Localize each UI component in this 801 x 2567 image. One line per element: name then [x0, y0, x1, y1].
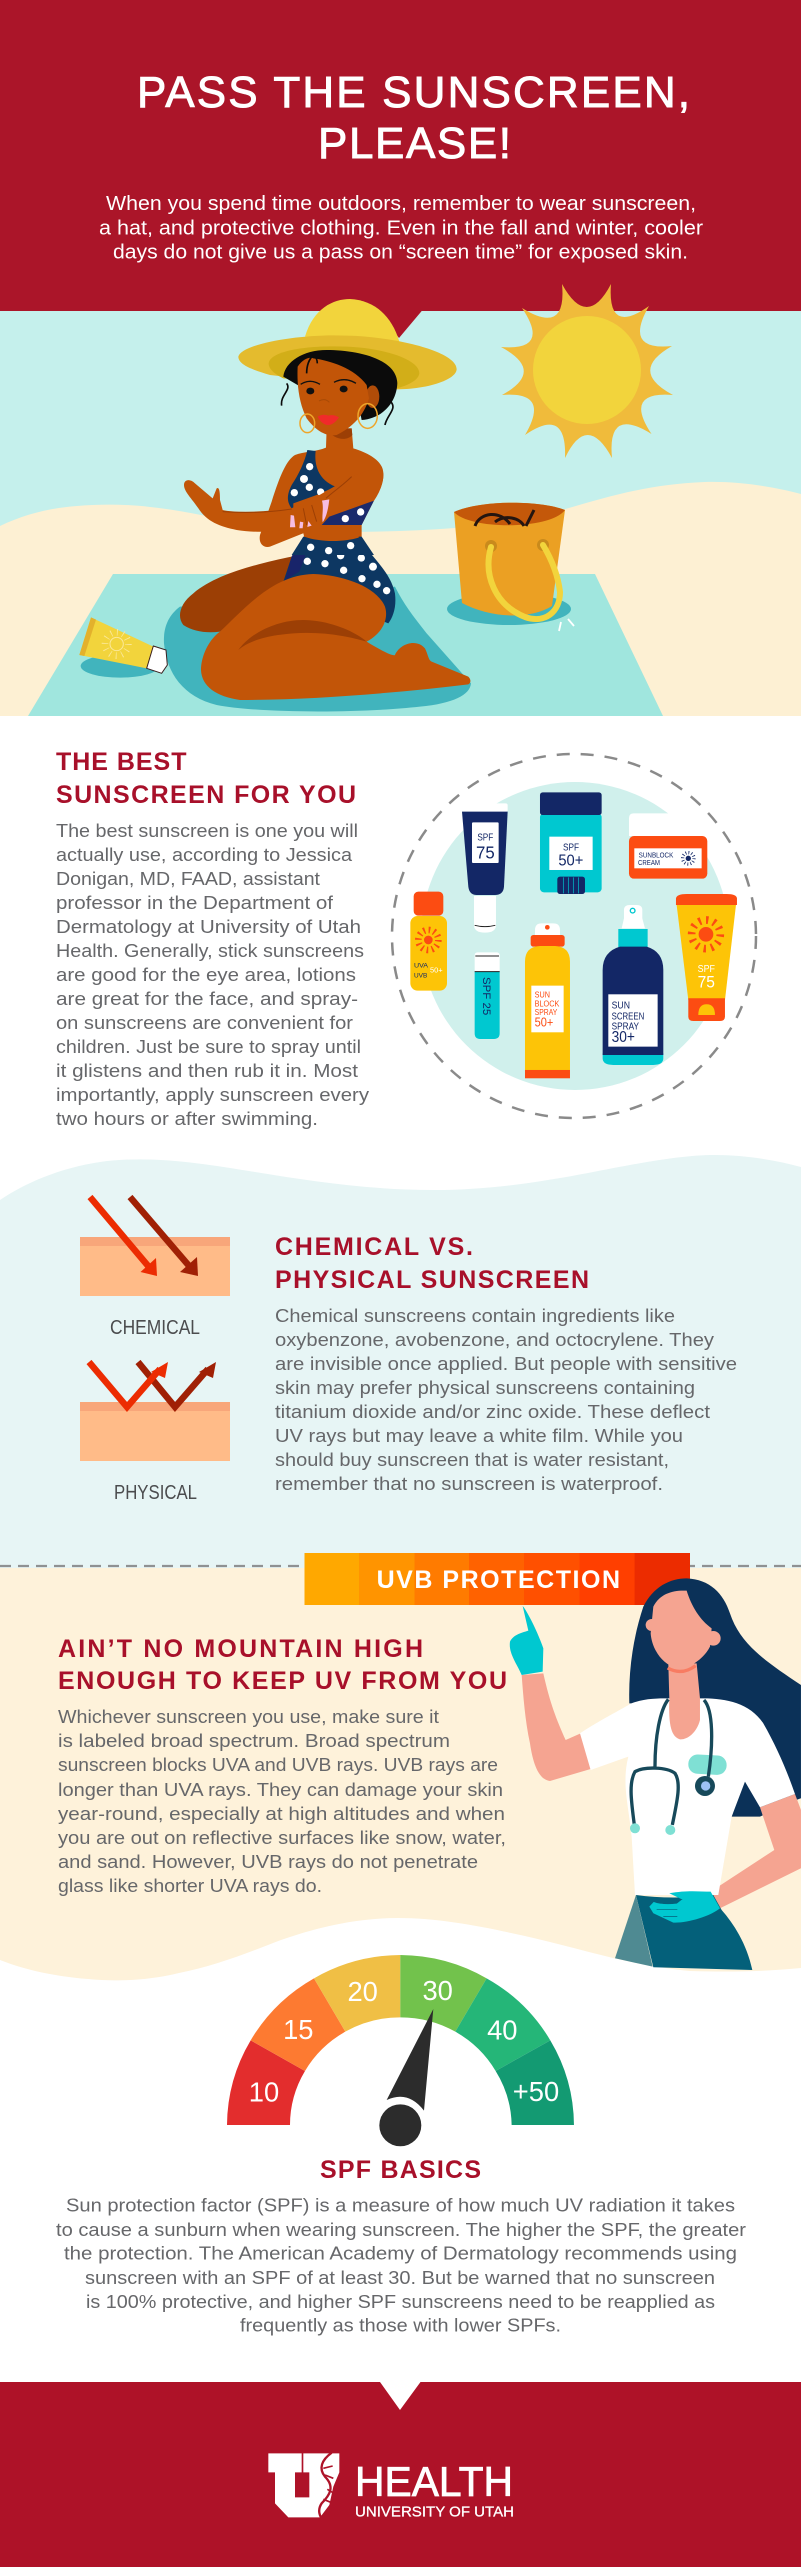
title — [137, 68, 690, 168]
text block: mountain: glass like shorter UVA rays do. — [58, 1875, 322, 1896]
text block: best sunscreen — [56, 820, 370, 1129]
icon: sunscreen tube — [79, 617, 167, 678]
logo: university of utah health: UNIVERSITY OF UTAH — [355, 2504, 514, 2521]
swimsuit bottoms — [283, 536, 395, 623]
text block: best sunscreen: professor in the Department of — [56, 892, 334, 913]
tube spf 75: SPF — [477, 832, 493, 843]
text block: spf basics: is 100% protective, and higher SPF sunscreens need to be reapplied as — [86, 2291, 715, 2312]
text block: spf basics: the protection. The American Academy of Dermatology recommends using — [64, 2243, 737, 2264]
uvb protection bar: UVB PROTECTION — [377, 1566, 620, 1594]
intro text: When you spend time outdoors, remember to wear sunscreen, — [106, 193, 696, 215]
logo: university of utah health: HEALTH — [355, 2458, 513, 2505]
heading: the best sunscreen for you — [56, 748, 356, 809]
spray sun block 50+: SUN — [535, 990, 550, 1000]
glove pointing — [510, 1606, 543, 1675]
intro text — [99, 193, 703, 264]
chart: spf gauge: 10 — [249, 2077, 279, 2108]
heading: the best sunscreen for you: SUNSCREEN FOR YOU — [56, 781, 356, 809]
text block: spf basics: sunscreen with an SPF of at least 30. But be warned that no sunscreen — [85, 2267, 715, 2288]
text block: mountain: year-round, especially at high altitudes and when — [58, 1803, 505, 1824]
hair — [629, 1578, 801, 1817]
stick spf 50+: 50+ — [558, 852, 583, 869]
tube spf 75 — [462, 803, 508, 933]
illustration: doctor — [510, 1578, 801, 1970]
text block: mountain: longer than UVA rays. They can damage your skin — [58, 1779, 503, 1800]
intro text: days do not give us a pass on “screen time” for exposed skin. — [113, 242, 688, 264]
back thigh — [180, 557, 292, 632]
text block: chemical vs physical: titanium dioxide and/or zinc oxide. These deflect — [275, 1401, 711, 1422]
text block: best sunscreen: two hours or after swimming. — [56, 1108, 318, 1129]
sun — [501, 284, 673, 458]
tube spf 75 large — [676, 894, 737, 1021]
header panel — [0, 0, 801, 340]
text block: spf basics: Sun protection factor (SPF) is a measure of how much UV radiation it takes — [66, 2195, 735, 2216]
text block: chemical vs physical: Chemical sunscreens contain ingredients like — [275, 1305, 675, 1326]
panel: sunscreen products — [392, 754, 756, 1118]
logo: university of utah health — [268, 2453, 514, 2521]
heading: mountain: ENOUGH TO KEEP UV FROM YOU — [58, 1667, 507, 1695]
text block: best sunscreen: Health. Generally, stick sunscreens — [56, 940, 364, 961]
tube spf 75 large: 75 — [698, 973, 715, 992]
face — [646, 1591, 721, 1669]
stick spf 25 — [475, 952, 500, 1039]
text block: mountain: sunscreen blocks UVA and UVB rays. UVB rays are — [58, 1754, 498, 1775]
chart: spf gauge: 20 — [347, 1976, 378, 2007]
text block: best sunscreen: importantly, apply sunscreen every — [56, 1084, 370, 1105]
text block: mountain: Whichever sunscreen you use, make sure it — [58, 1706, 440, 1727]
title: PASS THE SUNSCREEN, — [137, 68, 690, 117]
text block: mountain — [58, 1706, 506, 1896]
front thigh — [201, 574, 470, 700]
stethoscope — [630, 1699, 715, 1835]
arms — [184, 470, 383, 532]
bottle uva uvb: 50+ — [430, 966, 443, 975]
chart: spf gauge — [227, 1955, 574, 2146]
heading: the best sunscreen for you: THE BEST — [56, 748, 186, 776]
chart: spf gauge: 30 — [422, 1975, 453, 2006]
hat crown — [305, 299, 399, 342]
text block: spf basics — [56, 2195, 746, 2336]
text block: chemical vs physical: remember that no sunscreen is waterproof. — [275, 1473, 663, 1494]
icon: physical sunscreen diagram — [80, 1362, 230, 1461]
heading: chemical vs physical: CHEMICAL VS. — [275, 1233, 473, 1261]
text block: spf basics: to cause a sunburn when wearing sunscreen. The higher the SPF, the greater — [56, 2219, 746, 2240]
title: PLEASE! — [318, 119, 511, 168]
text block: spf basics: frequently as those with lower SPFs. — [240, 2315, 561, 2336]
gauge needle — [379, 2009, 433, 2146]
jar sunblock cream: CREAM — [638, 858, 660, 867]
woman lower body and sunscreen tube — [79, 536, 471, 711]
text block: best sunscreen: The best sunscreen is one you will — [56, 820, 358, 841]
hat brim — [238, 335, 457, 389]
glove on hip — [649, 1891, 720, 1923]
footer panel — [0, 2382, 801, 2567]
neck — [668, 1663, 700, 1739]
panel: mountain section background — [0, 1568, 801, 1980]
woman upper body and hat — [184, 299, 457, 555]
skirt — [615, 1895, 752, 1970]
bottle uva uvb — [410, 892, 447, 991]
shirt — [580, 1698, 795, 1895]
text block: mountain: you are out on reflective surfaces like snow, water, — [58, 1827, 506, 1848]
tube spf 75 large: SPF — [698, 964, 715, 975]
spray sun block 50+: 50+ — [535, 1015, 553, 1029]
chart: spf gauge: 15 — [283, 2014, 314, 2045]
spray sun block 50+: SPRAY — [535, 1007, 558, 1017]
face — [297, 355, 379, 439]
heading: spf basics: SPF BASICS — [320, 2156, 481, 2184]
intro text: a hat, and protective clothing. Even in the fall and winter, cooler — [99, 218, 703, 240]
text block: chemical vs physical: should buy sunscreen that is water resistant, — [275, 1449, 669, 1470]
swimsuit top — [288, 450, 374, 555]
stick spf 50+ — [540, 792, 602, 894]
stick spf 50+: SPF — [563, 842, 579, 853]
bucket — [447, 503, 574, 631]
text block: best sunscreen: it glistens and then rub it in. Most — [56, 1060, 359, 1081]
text block: best sunscreen: Dermatology at University of Utah — [56, 916, 361, 937]
label: physical: PHYSICAL — [114, 1482, 197, 1504]
text block: best sunscreen: are good for the eye area, lotions — [56, 964, 356, 985]
text block: best sunscreen: are great for the face, and spray- — [56, 988, 358, 1009]
spray sun screen 30+: SUN — [612, 1001, 630, 1012]
text block: best sunscreen: actually use, according to Jessica — [56, 844, 353, 865]
spray sun screen 30+: SCREEN — [612, 1011, 644, 1022]
text block: chemical vs physical: are invisible once applied. But people with sensitive — [275, 1353, 737, 1374]
bottle uva uvb: UVA — [414, 962, 429, 969]
text block: best sunscreen: Donigan, MD, FAAD, assistant — [56, 868, 321, 889]
badge — [688, 1754, 727, 1775]
heading: chemical vs physical — [275, 1233, 589, 1294]
label: chemical: CHEMICAL — [110, 1317, 200, 1339]
heading: mountain: AIN’T NO MOUNTAIN HIGH — [58, 1635, 423, 1663]
torso — [260, 428, 383, 547]
towel — [28, 574, 663, 716]
uvb protection bar — [304, 1553, 690, 1605]
jar sunblock cream — [629, 813, 707, 879]
heading: mountain — [58, 1635, 507, 1695]
tube spf 75: 75 — [476, 842, 495, 862]
hair — [281, 350, 397, 425]
text block: mountain: and sand. However, UVB rays do not penetrate — [58, 1851, 478, 1872]
text block: mountain: is labeled broad spectrum. Broad spectrum — [58, 1730, 450, 1751]
chart: spf gauge: +50 — [513, 2076, 559, 2107]
spray sun block 50+: BLOCK — [535, 998, 560, 1008]
jar sunblock cream: SUNBLOCK — [639, 850, 673, 859]
text block: best sunscreen: on sunscreens are convenient for — [56, 1012, 353, 1033]
text block: best sunscreen: children. Just be sure to spray until — [56, 1036, 361, 1057]
text block: chemical vs physical: oxybenzone, avobenzone, and octocrylene. They — [275, 1329, 715, 1350]
text block: chemical vs physical: UV rays but may leave a white film. While you — [275, 1425, 683, 1446]
text block: chemical vs physical: skin may prefer physical sunscreens containing — [275, 1377, 695, 1398]
icon: chemical sunscreen diagram — [80, 1197, 230, 1296]
towel shadow — [164, 587, 471, 711]
arm on hip — [711, 1794, 801, 1908]
stick spf 25: SPF 25 — [480, 977, 492, 1015]
arm pointing — [522, 1673, 591, 1781]
spray sun screen 30+ — [603, 905, 663, 1065]
chart: spf gauge: 40 — [487, 2014, 518, 2045]
heading: chemical vs physical: PHYSICAL SUNSCREEN — [275, 1266, 589, 1294]
panel: beach scene — [0, 284, 801, 716]
spray sun block 50+ — [525, 923, 570, 1078]
text block: chemical vs physical — [275, 1305, 737, 1494]
spray sun screen 30+: SPRAY — [612, 1022, 639, 1033]
panel: chemical vs physical background — [0, 1155, 801, 1569]
bottle uva uvb: UVB — [414, 972, 427, 979]
spray sun screen 30+: 30+ — [612, 1029, 635, 1046]
sand dunes — [0, 482, 801, 716]
